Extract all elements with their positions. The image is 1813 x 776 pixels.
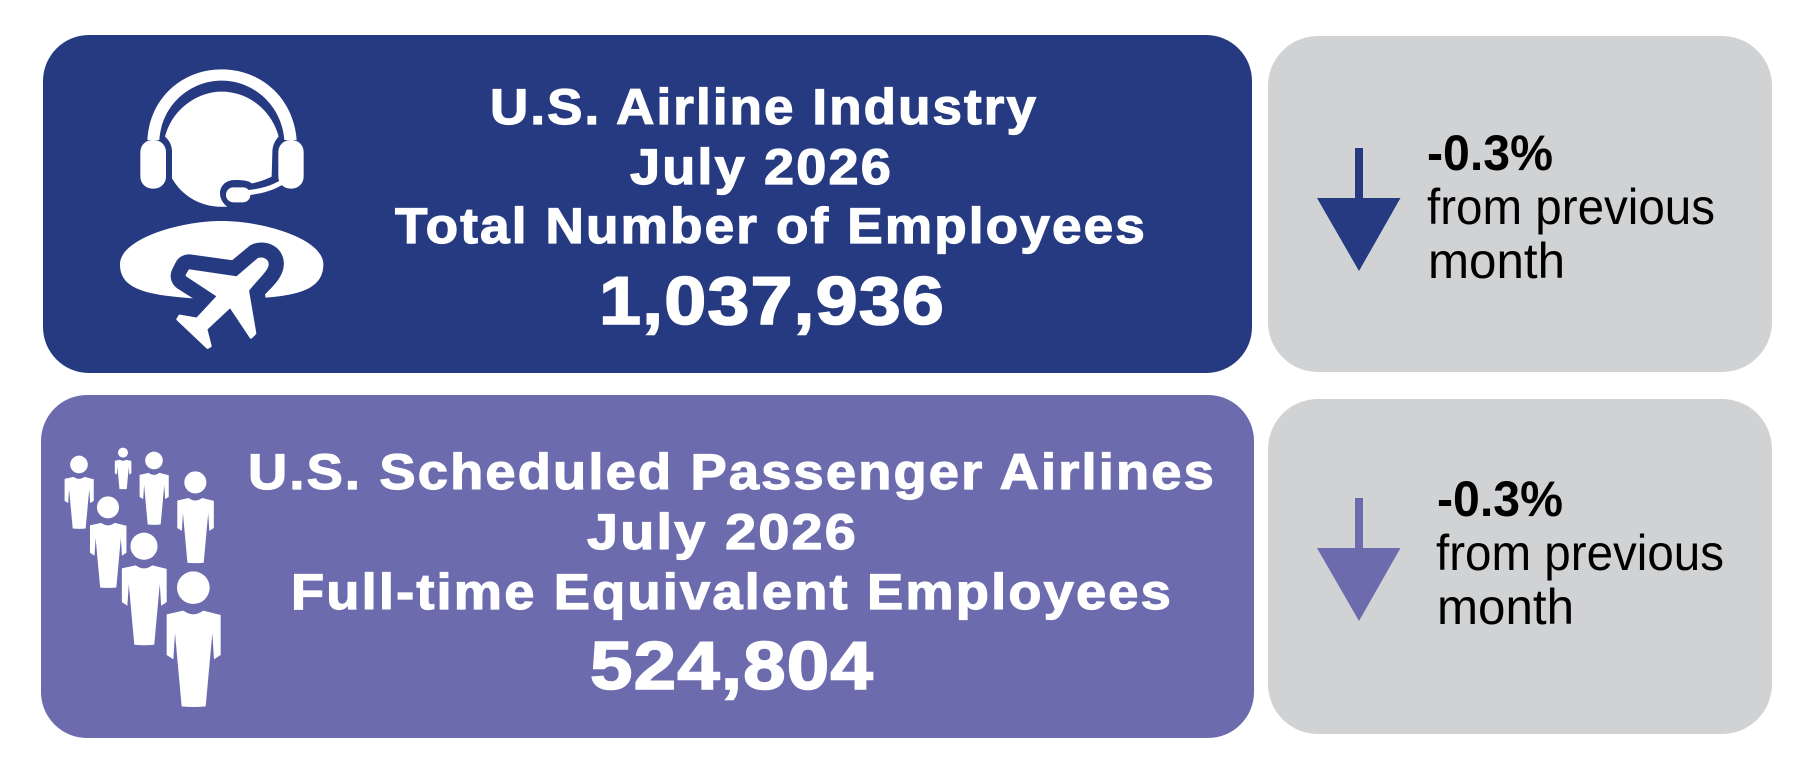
heading: U.S. Airline Industry: U.S. Airline Industry	[490, 79, 1038, 135]
text: -0.3% from previous month	[1436, 471, 1724, 635]
text: -0.3% from previous month: from previous	[1436, 525, 1724, 581]
arrow: down, purple	[1317, 498, 1400, 621]
panel background	[1268, 399, 1772, 734]
arrow: down, navy	[1317, 148, 1400, 271]
number: full-time equivalent employees: 524,804	[590, 628, 874, 704]
heading: July 2026: July 2026	[630, 139, 893, 195]
text: -0.3% from previous month: month	[1428, 233, 1565, 289]
text: -0.3% from previous month: -0.3%	[1427, 125, 1553, 181]
panel: change in full-time equivalent employees	[1268, 399, 1772, 734]
panel: U.S. Scheduled Passenger Airlines	[41, 395, 1254, 738]
panel background	[43, 35, 1252, 373]
heading: Total Number of Employees: Total Number of Employees	[395, 198, 1147, 254]
panel: change in total employees	[1268, 36, 1772, 372]
icon: headset agent and airplane	[120, 69, 323, 349]
text: -0.3% from previous month: month	[1437, 579, 1574, 635]
panel background	[1268, 36, 1772, 372]
panel background	[41, 395, 1254, 738]
icon: group of people	[65, 448, 221, 707]
heading: Full-time Equivalent Employees: Full-time Equivalent Employees	[291, 564, 1173, 620]
number: total employees: 1,037,936	[599, 263, 945, 339]
heading: July 2026: July 2026	[587, 504, 858, 560]
text: -0.3% from previous month	[1427, 125, 1715, 289]
heading: U.S. Scheduled Passenger Airlines: U.S. Scheduled Passenger Airlines	[248, 444, 1216, 500]
text: -0.3% from previous month: -0.3%	[1437, 471, 1563, 527]
panel: U.S. Airline Industry	[43, 35, 1252, 373]
text: -0.3% from previous month: from previous	[1427, 179, 1715, 235]
